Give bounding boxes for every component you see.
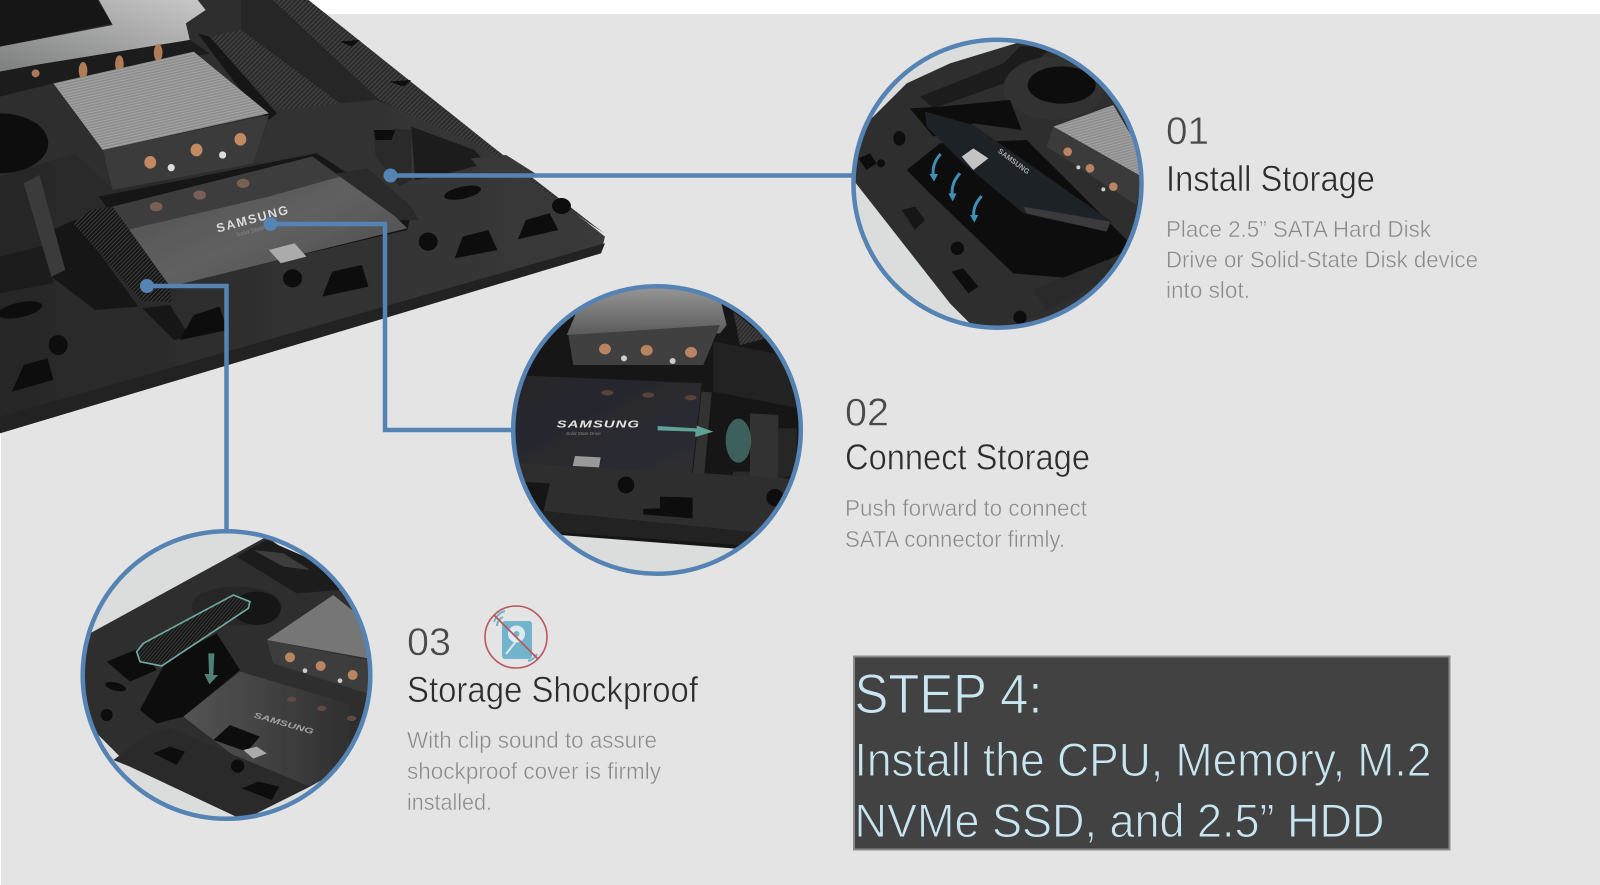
circle: storage shockproof close-up <box>80 529 373 821</box>
main image: motherboard storage bay <box>0 0 605 433</box>
step 03 text block <box>407 621 699 815</box>
circle: storage shockproof close-up: SAMSUNG <box>253 711 315 736</box>
step 02 description: SATA connector firmly. <box>845 526 1065 552</box>
step 01 description <box>1166 216 1478 303</box>
circle: install storage close-up <box>851 38 1144 330</box>
step 02 description <box>845 495 1088 552</box>
circle: install storage close-up: SAMSUNG <box>996 146 1032 176</box>
circle: connect storage close-up: SAMSUNG <box>557 420 640 431</box>
SSD brand label: Solid State Drive <box>236 221 281 239</box>
SSD brand label: SAMSUNG <box>215 203 291 235</box>
step 02 description: Push forward to connect <box>845 495 1088 521</box>
step 03 heading: Storage Shockproof <box>407 669 699 710</box>
step 03 description: shockproof cover is firmly <box>407 758 661 784</box>
step 02 number: 02 <box>845 392 889 434</box>
circle: connect storage close-up <box>511 284 804 576</box>
step 4 title box <box>854 656 1450 850</box>
connector line to step 01 <box>390 173 852 178</box>
connector line to step 03 <box>147 286 226 531</box>
title line: storage types: NVMe SSD, and 2.5” HDD <box>854 794 1384 847</box>
step 01 description: Place 2.5” SATA Hard Disk <box>1166 216 1431 242</box>
step 03 description: installed. <box>407 789 492 815</box>
step 01 text block <box>1166 110 1478 303</box>
step 03 number: 03 <box>407 621 451 664</box>
title line: step 4: STEP 4: <box>854 662 1042 725</box>
step 02 text block <box>845 392 1090 552</box>
connector line to step 02 <box>270 224 512 430</box>
step 03 description: With clip sound to assure <box>407 727 657 753</box>
marker dots <box>140 168 398 293</box>
step 03 description <box>407 727 661 815</box>
step 01 number: 01 <box>1166 110 1209 153</box>
title line: install components: Install the CPU, Memory, M.2 <box>854 733 1432 786</box>
step 01 heading: Install Storage <box>1166 158 1375 199</box>
icon: no-shock hard disk <box>485 606 547 668</box>
circle: connect storage close-up: Solid State Drive <box>566 431 601 436</box>
step 02 heading: Connect Storage <box>845 436 1090 478</box>
step 01 description: into slot. <box>1166 277 1250 303</box>
step 01 description: Drive or Solid-State Disk device <box>1166 246 1478 272</box>
